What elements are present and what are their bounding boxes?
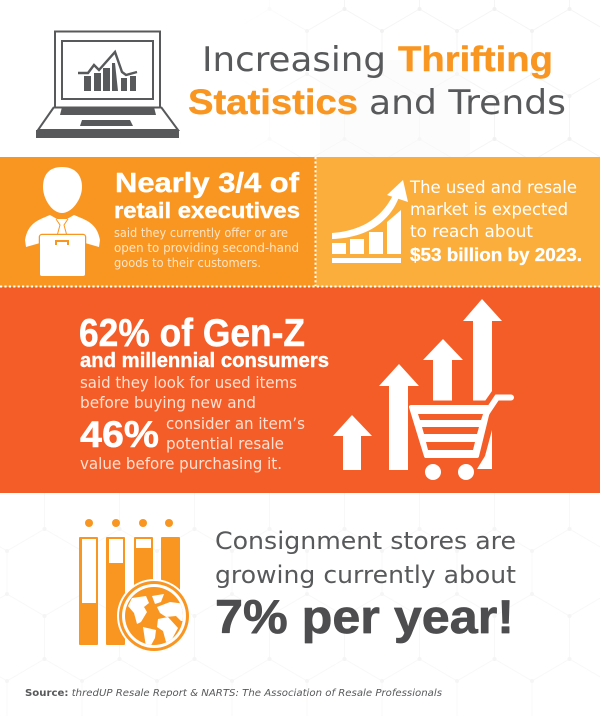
- text block: market forecast: to reach about: [410, 222, 533, 242]
- text block: market forecast: The used and resale: [409, 178, 577, 198]
- text block: consignment stores: growing currently about: [215, 561, 516, 589]
- title: Increasing: [202, 40, 386, 80]
- panel: Gen-Z consumers: [0, 287, 600, 493]
- text block: resale value: value before purchasing it.: [80, 454, 282, 473]
- icon: rising arrows and shopping cart: [333, 299, 511, 480]
- text block: resale value: consider an item’s: [166, 414, 305, 433]
- title: and Trends: [369, 83, 566, 123]
- text block: executives detail: [114, 226, 299, 270]
- text block: executives detail: open to providing second-hand: [114, 241, 299, 255]
- heading: millennial consumers: and millennial consumers: [80, 350, 329, 372]
- icon: growth chart with arrow: [332, 180, 408, 263]
- text block: market forecast: market is expected: [410, 200, 568, 220]
- text block: executives detail: said they currently offer or are: [114, 226, 288, 240]
- text block: market forecast: $53 billion by 2023.: [410, 245, 582, 265]
- text block: look for used items: [80, 373, 297, 412]
- stat: 7% per year: 7% per year!: [215, 590, 514, 643]
- stat: 46%: 46%: [80, 414, 159, 455]
- title: Thrifting: [398, 40, 553, 79]
- panel: resale market: [316, 157, 600, 287]
- text block: resale value: potential resale: [166, 434, 284, 453]
- text block: look for used items: before buying new and: [80, 393, 256, 412]
- icon: laptop with chart: [36, 32, 179, 138]
- icon: bars with globe: [79, 519, 192, 653]
- text block: consignment stores: Consignment stores are: [215, 527, 516, 555]
- text block: consignment stores: [215, 527, 516, 589]
- heading: Nearly 3/4: Nearly 3/4 of: [115, 167, 300, 198]
- title: Statistics: [188, 83, 358, 122]
- text block: look for used items: said they look for used items: [80, 373, 297, 392]
- icon: businessman with briefcase: [25, 167, 100, 276]
- text block: executives detail: goods to their customers.: [114, 256, 261, 270]
- text block: market forecast: [409, 178, 582, 265]
- heading: retail executives: retail executives: [114, 198, 300, 223]
- title: [188, 40, 566, 123]
- heading: 62% of Gen-Z: 62% of Gen-Z: [79, 312, 305, 355]
- source note: Source: thredUP Resale Report & NARTS: The Association of Resale Professionals: [25, 688, 442, 699]
- text block: resale value: [80, 414, 305, 473]
- panel: retail executives: [0, 157, 316, 287]
